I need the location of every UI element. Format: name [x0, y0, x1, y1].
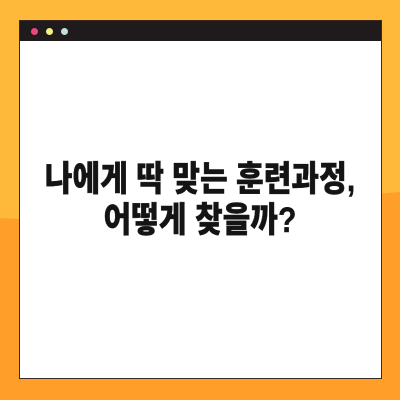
title: 나에게 딱 맞는 훈련과정,: [45, 160, 355, 199]
title: [45, 160, 355, 240]
title: 어떻게 찾을까?: [104, 201, 296, 240]
icon: yellow window dot: [46, 28, 53, 35]
icon: pink window dot: [31, 28, 38, 35]
icon: pale blue window dot: [61, 28, 68, 35]
window title bar: [20, 21, 381, 41]
